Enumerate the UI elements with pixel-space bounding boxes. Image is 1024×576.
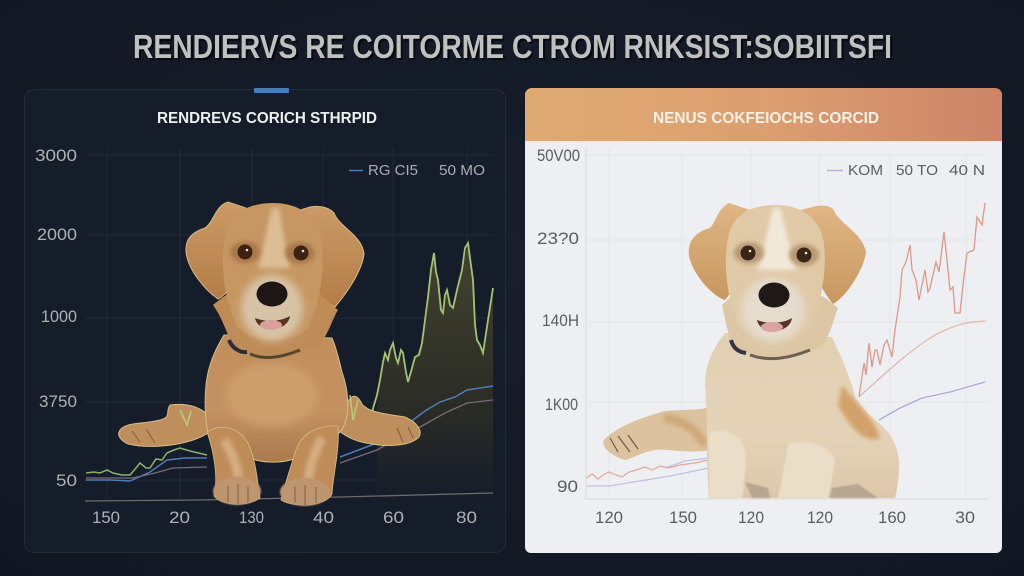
mouth xyxy=(757,318,792,331)
green line right xyxy=(350,243,493,425)
neck ruff xyxy=(722,290,838,357)
legend xyxy=(349,162,485,179)
blue line xyxy=(86,386,493,481)
y axis labels: 50 xyxy=(56,471,77,490)
y axis labels: 3000 xyxy=(35,146,77,165)
eyes xyxy=(230,241,260,263)
paws xyxy=(213,477,261,505)
x axis labels: 80 xyxy=(456,508,477,527)
panel: left dark chart xyxy=(24,88,506,552)
mouth xyxy=(255,316,290,329)
y axis labels: 1K00 xyxy=(545,395,578,414)
lavender curve xyxy=(879,382,985,420)
extended left leg xyxy=(603,407,712,460)
head xyxy=(726,205,825,340)
x axis labels: 120 xyxy=(738,508,764,527)
panel: right light chart xyxy=(525,88,1002,553)
muzzle xyxy=(741,278,805,342)
muzzle xyxy=(241,275,303,341)
y axis labels: 140H xyxy=(542,311,579,330)
x axis labels: 20 xyxy=(169,508,190,527)
legend xyxy=(827,162,985,179)
legend: 50 MO xyxy=(439,162,485,179)
x axis labels: 150 xyxy=(92,508,120,527)
leg highlights xyxy=(224,438,322,480)
x axis labels: 60 xyxy=(383,508,404,527)
body xyxy=(205,335,348,462)
y axis labels: 3750 xyxy=(39,392,77,411)
side legs xyxy=(119,396,420,446)
forehead blaze xyxy=(757,208,796,270)
x axis labels: 30 xyxy=(955,508,975,527)
legend: 40 N xyxy=(949,162,985,179)
paw toes xyxy=(610,435,638,452)
panel body xyxy=(525,89,1002,553)
title: RENDIERVS RE COITORME CTROM RNKSIST:SOBIITSFI xyxy=(135,30,894,67)
panel header xyxy=(525,88,1002,141)
y axis labels xyxy=(537,146,580,496)
lavender line left xyxy=(587,458,709,486)
chart: green area and lines xyxy=(85,243,493,501)
eyes xyxy=(734,242,764,264)
front leg highlights xyxy=(709,431,835,498)
accent tab xyxy=(254,88,289,93)
x axis labels xyxy=(595,508,975,527)
front legs xyxy=(207,426,338,505)
axis line xyxy=(586,147,988,499)
x axis labels: 160 xyxy=(878,508,906,527)
body xyxy=(705,333,899,498)
icon: light panel dog xyxy=(603,203,899,498)
x axis labels xyxy=(92,508,477,527)
y axis labels: 90 xyxy=(557,477,578,496)
legend: KOM xyxy=(848,162,883,179)
chest highlight xyxy=(226,363,318,427)
area under green line xyxy=(377,243,493,498)
y axis labels: 50V00 xyxy=(537,146,580,165)
collar xyxy=(229,340,247,352)
collar xyxy=(731,340,746,353)
salmon curve xyxy=(859,321,985,397)
nose xyxy=(256,282,288,306)
shadow between legs xyxy=(745,482,878,498)
y axis labels xyxy=(35,146,77,490)
y axis labels: 23?0 xyxy=(537,229,579,248)
legend: 50 TO xyxy=(896,162,938,179)
panel heading: RENDREVS CORICH STHRPID xyxy=(157,110,377,127)
y axis labels: 1000 xyxy=(41,307,77,326)
x axis labels: 120 xyxy=(807,508,833,527)
salmon line left xyxy=(587,460,709,479)
mauve line xyxy=(86,400,493,478)
chart: lines xyxy=(587,203,985,486)
legend: RG CI5 xyxy=(368,162,418,179)
ears xyxy=(689,203,750,300)
head xyxy=(223,203,323,340)
grid lines xyxy=(586,147,988,499)
panel heading: NENUS COKFEIOCHS CORCID xyxy=(653,110,879,127)
x axis labels: 40 xyxy=(313,508,334,527)
paw toes xyxy=(132,427,413,505)
title: RENDIERVS RE COITORME CTROM RNKSIST:SOBIITSFI xyxy=(133,28,892,65)
neck ruff xyxy=(213,289,338,357)
baseline xyxy=(85,493,493,501)
ears xyxy=(186,202,246,299)
side tan patch xyxy=(838,385,880,439)
x axis labels: 130 xyxy=(239,508,264,527)
green fur tips xyxy=(180,395,358,425)
nose xyxy=(758,282,790,308)
red line right xyxy=(859,203,985,397)
forehead blaze xyxy=(258,208,290,268)
icon: dark panel dog xyxy=(119,202,420,506)
x axis labels: 150 xyxy=(669,508,697,527)
leg shading xyxy=(664,418,705,445)
panel frame xyxy=(24,90,506,552)
x axis labels: 120 xyxy=(595,508,623,527)
grid lines xyxy=(85,147,493,500)
y axis labels: 2000 xyxy=(37,225,77,244)
green line left xyxy=(86,448,207,475)
